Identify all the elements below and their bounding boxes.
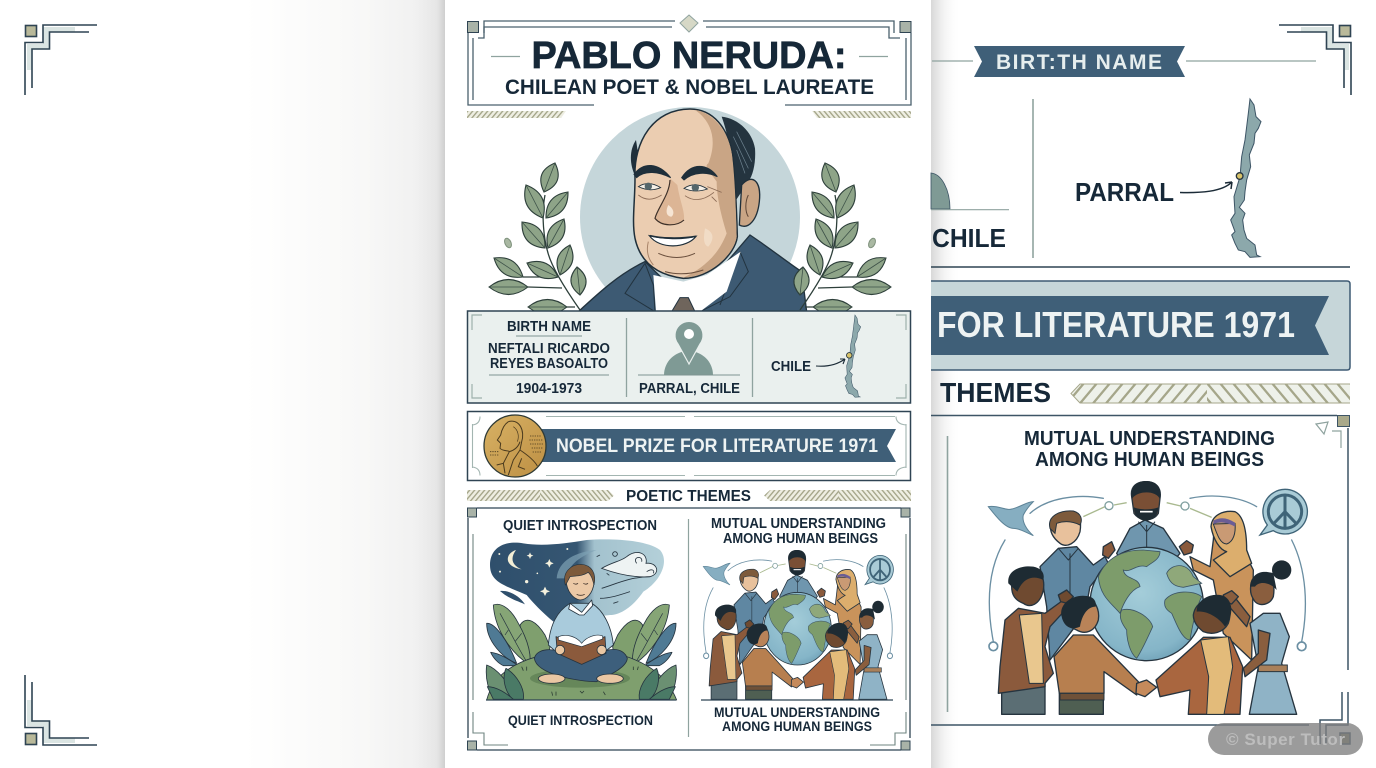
ground lines	[486, 699, 893, 701]
map: Chile large	[1231, 99, 1261, 257]
panel: themes	[468, 508, 910, 750]
subtitle: CHILEAN POET & NOBEL LAUREATE	[505, 75, 874, 99]
heading: MUTUAL UNDERSTANDING	[1024, 427, 1275, 450]
heading: themes: THEMES	[940, 377, 1051, 408]
ornamental strip	[1071, 384, 1350, 403]
illustration: people around globe large	[988, 481, 1307, 714]
corner: top right	[1279, 25, 1351, 95]
central poster panel	[466, 14, 912, 751]
right shadow	[931, 0, 961, 768]
icon: hill fragment	[931, 173, 950, 209]
corner ornament	[1320, 692, 1350, 744]
theme heading: quiet introspection: QUIET INTROSPECTION	[503, 518, 657, 534]
arrow to Parral	[1180, 182, 1232, 193]
heading: poetic themes: POETIC THEMES	[626, 488, 751, 505]
panel: Nobel prize	[468, 412, 910, 480]
corner: top left	[25, 25, 97, 95]
heading: AMONG HUMAN BEINGS	[1035, 448, 1264, 471]
theme heading: mutual understanding	[711, 516, 886, 547]
left shadow	[245, 0, 445, 768]
text: birthplace: PARRAL, CHILE	[639, 381, 740, 397]
caption: mutual understanding	[714, 704, 880, 734]
portrait: Pablo Neruda	[578, 107, 807, 327]
panel: mutual understanding enlarged	[931, 416, 1350, 744]
text: birth name: BIRTH NAME	[507, 319, 591, 335]
panel: birth facts	[468, 311, 910, 403]
banner text: NOBEL PRIZE FOR LITERATURE 1971	[556, 435, 878, 457]
ribbon: birth name: BIRT:TH NAME	[996, 51, 1162, 74]
theme heading: mutual understanding: MUTUAL UNDERSTANDING	[711, 516, 886, 532]
icon: location pin	[638, 321, 740, 375]
corner: bottom left	[25, 675, 97, 745]
map: Chile small	[845, 315, 861, 397]
text: birth name	[488, 319, 610, 397]
panel: Nobel banner enlarged	[931, 281, 1350, 370]
title block	[467, 15, 911, 118]
caption: quiet introspection: QUIET INTROSPECTION	[508, 712, 653, 728]
arrow to Chile	[816, 359, 845, 366]
text: birth name: NEFTALI RICARDO	[488, 341, 610, 357]
laurel branch: right	[794, 163, 891, 314]
line under hill	[931, 209, 1009, 211]
divider	[1032, 99, 1034, 258]
watermark: © Super Tutor	[1226, 730, 1345, 749]
heading: PABLO NERUDA:	[532, 35, 846, 77]
text: Chile label: CHILE	[771, 359, 811, 375]
banner ribbon	[540, 429, 896, 462]
watermark	[1208, 723, 1363, 755]
zoomed detail panel: right	[931, 46, 1350, 744]
text: birth name: REYES BASOALTO	[490, 356, 608, 372]
illustration: people around globe	[703, 550, 893, 699]
heading: poetic themes	[467, 488, 911, 505]
caption: mutual understanding: AMONG HUMAN BEINGS	[722, 718, 872, 734]
ribbon: birth name	[932, 46, 1316, 77]
caption: mutual understanding: MUTUAL UNDERSTANDING	[714, 704, 880, 720]
text: Chile: CHILE	[932, 223, 1006, 253]
theme heading: mutual understanding: AMONG HUMAN BEINGS	[723, 531, 878, 547]
icon: Nobel medal	[484, 415, 546, 477]
laurel branch: left	[489, 163, 586, 314]
panel: Nobel banner enlarged: FOR LITERATURE 1971	[937, 304, 1295, 345]
heading	[1024, 427, 1275, 471]
text: birth name: 1904-1973	[516, 381, 582, 397]
rule	[931, 266, 1350, 268]
text: Parral: PARRAL	[1075, 177, 1174, 207]
illustration: reader in nature	[486, 539, 677, 700]
